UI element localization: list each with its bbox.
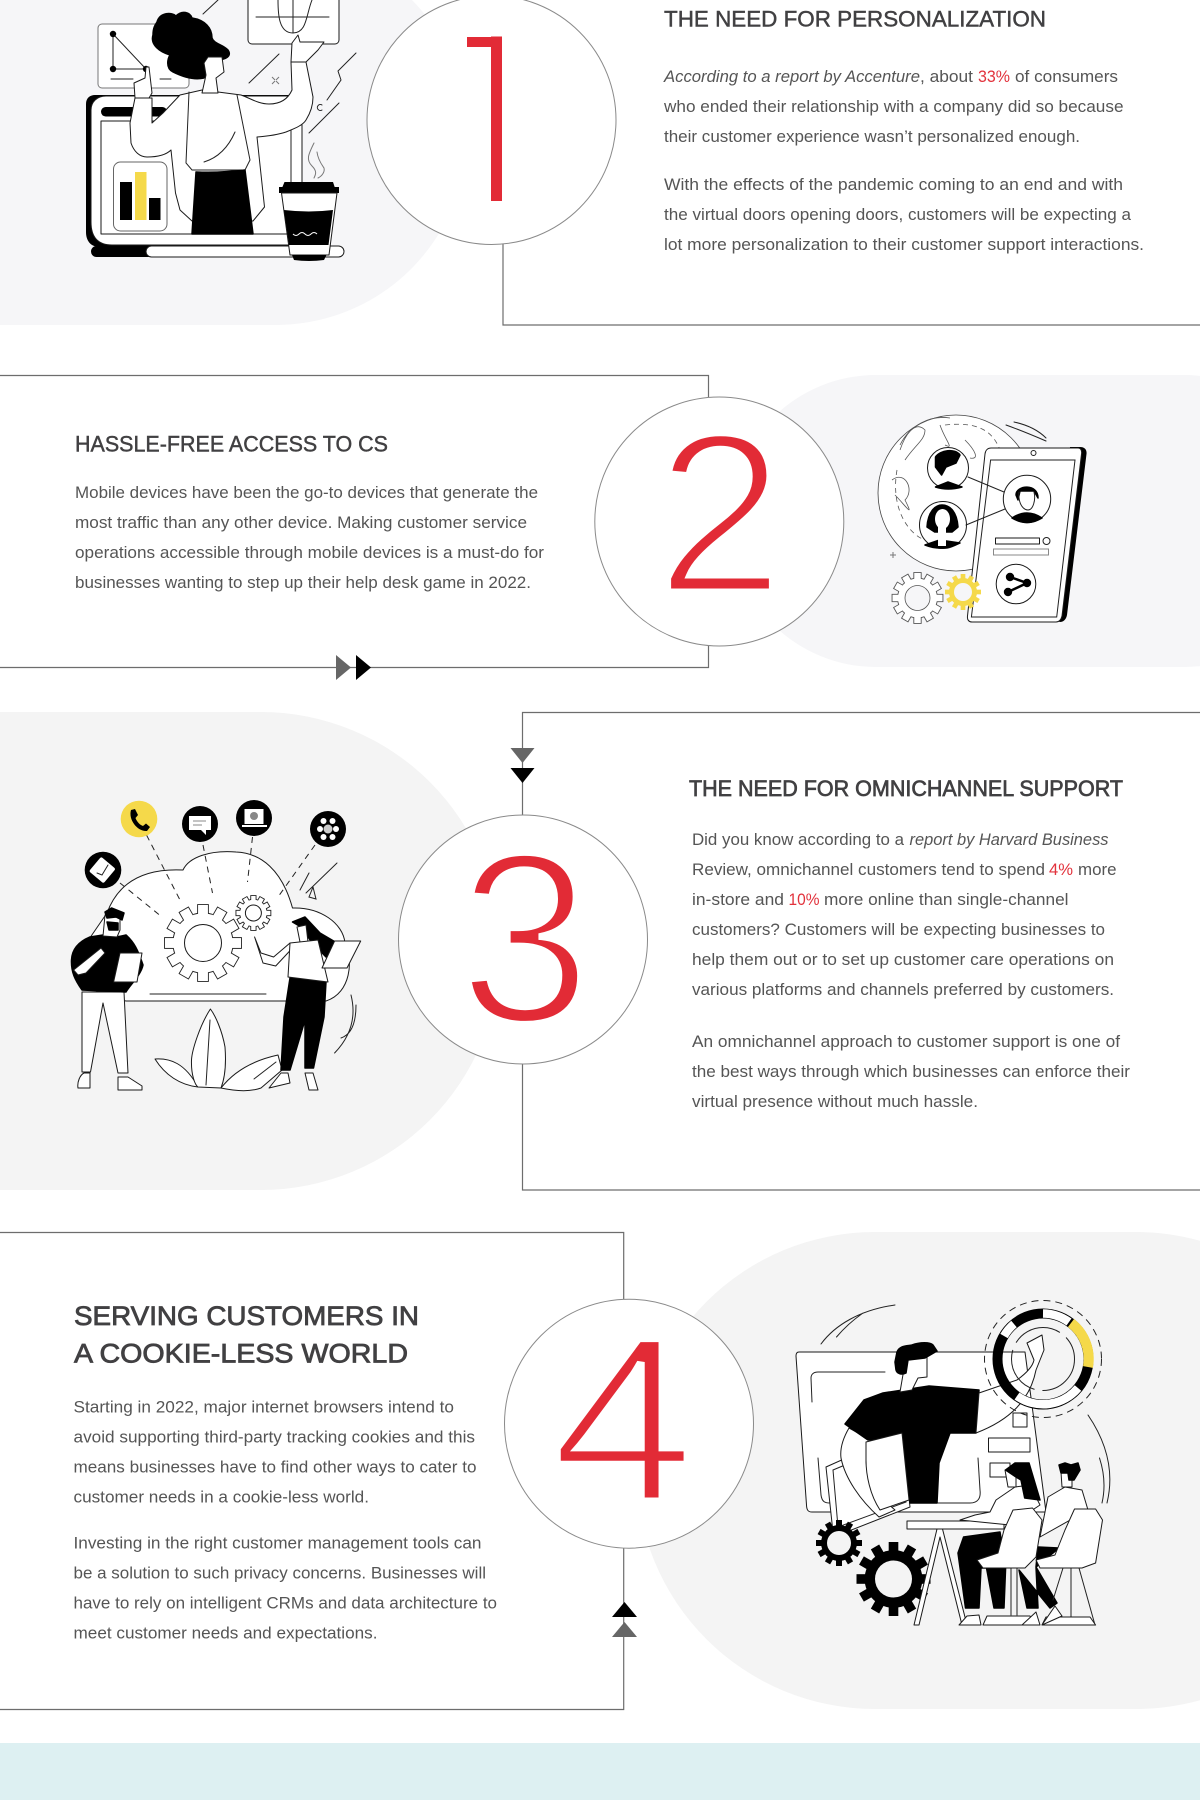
heading 4: SERVING CUSTOMERS IN [74, 1301, 419, 1331]
background blob 4 [636, 1232, 1200, 1709]
left diagram card [98, 24, 189, 88]
heading 1: THE NEED FOR PERSONALIZATION [664, 6, 1046, 32]
body text 1: their customer experience wasn’t personalized enough. [664, 127, 1080, 146]
body text 2 [75, 483, 544, 592]
avatar 2 [920, 502, 966, 548]
body text 4: avoid supporting third-party tracking cookies and this [74, 1428, 475, 1447]
table [907, 1521, 1004, 1625]
heading 4 [74, 1301, 419, 1369]
deco arcs [821, 1305, 1110, 1503]
body text 4: Starting in 2022, major internet browsers intend to [74, 1398, 454, 1417]
yellow gear [945, 574, 981, 610]
number circle 4: 4 [551, 1288, 695, 1552]
presenter [841, 1335, 1044, 1517]
body text 1: the virtual doors opening doors, customers will be expecting a [664, 205, 1132, 224]
coffee cup [279, 143, 339, 261]
body text 4: have to rely on intelligent CRMs and data architecture to [74, 1594, 497, 1613]
illustration: woman at laptop [86, 0, 356, 261]
laptop [86, 95, 344, 257]
body text 3: help them out or to set up customer care operations on [692, 950, 1114, 969]
body text 3: Review, omnichannel customers tend to spend [692, 860, 1045, 879]
body text 3: in-store and [692, 890, 784, 909]
background blob 2 [730, 375, 1200, 667]
body text 3: the best ways through which businesses can enforce their [692, 1062, 1130, 1081]
body text 4: be a solution to such privacy concerns. Businesses will [74, 1564, 486, 1583]
body text 4: Investing in the right customer management tools can [74, 1534, 482, 1553]
panel: section 2 hassle-free access [0, 375, 1200, 680]
body text 2: Mobile devices have been the go-to devices that generate the [75, 483, 538, 502]
deco lines [203, 0, 356, 163]
leaves [155, 1009, 282, 1091]
sparkle [272, 77, 279, 84]
globe [878, 415, 1034, 571]
background blob 1 [0, 0, 467, 325]
man [71, 908, 143, 1090]
avatar 1 [928, 448, 968, 489]
icon: laptop [236, 800, 272, 836]
cloud [79, 852, 349, 1001]
icon: phone [121, 801, 157, 837]
gears [816, 1520, 930, 1616]
number circle 1 [367, 0, 616, 258]
white gear [892, 573, 942, 623]
body text 3: 10% [788, 890, 820, 909]
body text 1: , about [920, 67, 973, 86]
top right card [248, 0, 339, 44]
heading 3: THE NEED FOR OMNICHANNEL SUPPORT [689, 776, 1123, 801]
woman [255, 917, 361, 1090]
icon: chat [182, 806, 218, 842]
connector frame 1 [503, 240, 1200, 325]
body text 3: more [1078, 860, 1116, 879]
body text 4: customer needs in a cookie-less world. [74, 1488, 369, 1507]
illustration: global contacts phone [878, 415, 1087, 623]
body text 1: who ended their relationship with a company did so because [663, 97, 1124, 116]
body text 2: most traffic than any other device. Making customer service [75, 513, 527, 532]
connector frame 3 [522, 712, 1200, 1190]
footer band [0, 1743, 1200, 1800]
body text 3: report by Harvard Business [910, 830, 1109, 849]
big gear [165, 905, 241, 981]
body text 4: meet customer needs and expectations. [74, 1624, 377, 1643]
donut dashboard [984, 1300, 1102, 1418]
share icon [996, 564, 1036, 604]
bar chart card [114, 162, 167, 231]
body text 3: customers? Customers will be expecting businesses to [692, 920, 1105, 939]
body text 3: various platforms and channels preferred by customers. [692, 980, 1114, 999]
body text 3: Did you know according to a [692, 830, 905, 849]
small marks [890, 552, 896, 558]
body text 1 [663, 67, 1144, 254]
board [796, 1352, 1046, 1512]
illustration: presenter with dashboard [796, 1300, 1110, 1625]
number circle 3 [398, 803, 648, 1074]
body text 4 [74, 1398, 497, 1643]
body text 3: more online than single-channel [824, 890, 1068, 909]
connector frame 4 [0, 1232, 624, 1710]
body text 3 [692, 830, 1130, 1111]
tablet [826, 1433, 910, 1537]
panel: section 3 omnichannel [0, 712, 1200, 1190]
background blob 3 [0, 712, 500, 1190]
number circle 2 [595, 387, 844, 646]
body text 1: lot more personalization to their customer support interactions. [664, 235, 1144, 254]
small gear [236, 896, 270, 930]
arrows pointing down [510, 748, 534, 783]
woman [130, 12, 324, 234]
arrows pointing up [612, 1602, 637, 1637]
avatar 3 [1003, 475, 1051, 523]
number circle 4 [504, 1288, 754, 1552]
body text 3: virtual presence without much hassle. [692, 1092, 978, 1111]
body text 3: An omnichannel approach to customer support is one of [692, 1032, 1120, 1051]
body text 2: businesses wanting to step up their help desk game in 2022. [75, 573, 531, 592]
body text 1: With the effects of the pandemic coming to an end and with [664, 175, 1123, 194]
illustration: team with cloud [71, 800, 361, 1091]
deco [150, 863, 337, 994]
heading 4: A COOKIE-LESS WORLD [74, 1339, 408, 1369]
panel: section 4 cookie-less world [0, 1232, 1200, 1710]
icon: mail [85, 852, 121, 888]
marks arcs [1006, 422, 1046, 441]
number circle 3: 3 [459, 803, 591, 1074]
number circle 2: 2 [656, 387, 784, 641]
phone [966, 447, 1087, 622]
body text 3: 4% [1049, 860, 1073, 879]
body text 1: 33% [978, 67, 1010, 86]
body text 1: of consumers [1015, 67, 1118, 86]
icon: network [310, 811, 346, 847]
connector frame 2 [0, 376, 708, 668]
body text 2: operations accessible through mobile devices is a must-do for [75, 543, 544, 562]
body text 1: According to a report by Accenture [663, 67, 920, 86]
panel: section 1 personalization [0, 0, 1200, 325]
arrows pointing right [336, 655, 371, 680]
seated people [958, 1463, 1102, 1625]
channel links [120, 835, 315, 917]
body text 4: means businesses have to find other ways to cater to [74, 1458, 476, 1477]
heading 2: HASSLE-FREE ACCESS TO CS [75, 432, 388, 457]
